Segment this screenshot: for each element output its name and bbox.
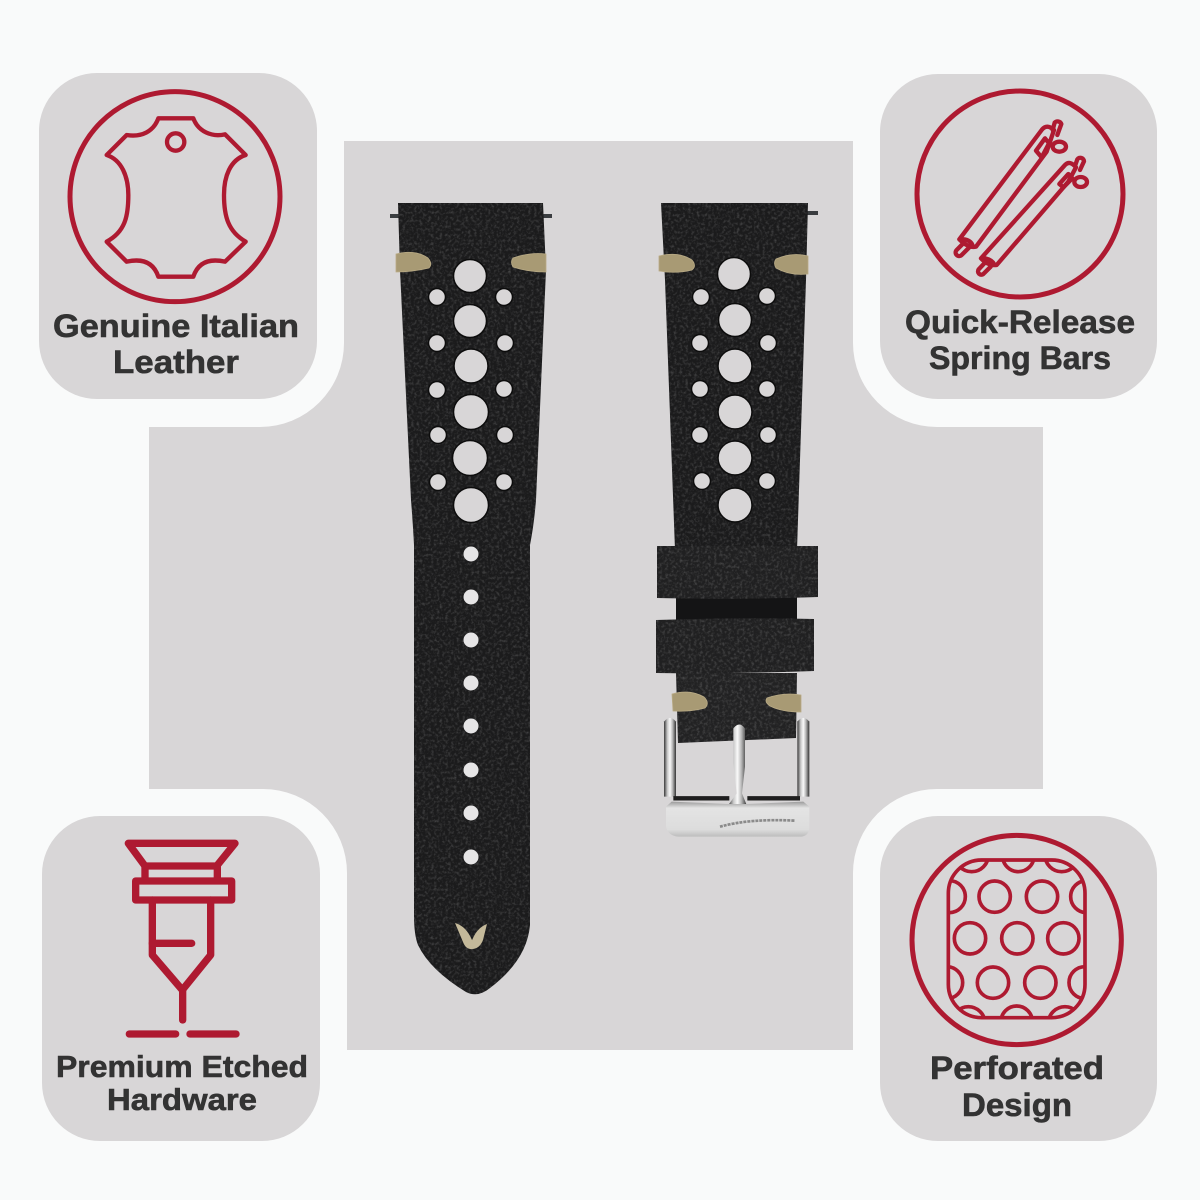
strap gap segments — [676, 590, 797, 630]
lower stitches — [672, 692, 801, 712]
long watch strap piece — [390, 203, 552, 994]
small perforations — [428, 288, 514, 490]
buckle side watch strap piece — [656, 203, 818, 837]
label: perforated design: Perforated — [930, 1050, 1104, 1086]
label: quick-release spring bars: Spring Bars — [929, 340, 1111, 376]
background panel: central grey cross — [149, 141, 1043, 1050]
spring bar tip — [806, 211, 818, 215]
keeper loop 1 — [657, 546, 818, 599]
label: genuine italian leather: Leather — [113, 344, 239, 380]
buckle tongue — [728, 724, 747, 805]
buckle right bar — [797, 718, 809, 797]
large perforations — [452, 260, 488, 522]
label: perforated design: Design — [962, 1087, 1072, 1123]
label: quick-release spring bars: Quick-Release — [905, 304, 1135, 340]
panel: perforated design — [853, 789, 1157, 1141]
buckle left bar — [664, 718, 676, 797]
adjustment holes — [464, 546, 478, 864]
keeper loop 2 — [656, 618, 814, 673]
icon: leather hide — [70, 92, 280, 302]
label: genuine italian leather: Genuine Italian — [53, 308, 299, 344]
label: premium etched hardware: Hardware — [107, 1082, 257, 1117]
icon: spring bars — [917, 91, 1123, 297]
buckle — [664, 718, 809, 837]
small perforations — [692, 288, 776, 490]
large perforations — [718, 258, 752, 522]
spring bar tips — [390, 214, 552, 218]
panel: premium etched hardware — [15, 789, 347, 1168]
logo engraving — [720, 820, 795, 827]
panel: quick-release spring bars — [853, 47, 1184, 427]
strap upper body — [661, 203, 808, 550]
upper stitches — [659, 254, 808, 274]
stitches — [396, 252, 546, 272]
v stitch — [455, 923, 487, 949]
icon: etching laser — [128, 843, 236, 1034]
icon: perforated pattern — [912, 835, 1121, 1045]
buckle inner edge — [673, 792, 800, 805]
strap body — [398, 203, 546, 994]
panel: genuine italian leather — [12, 46, 344, 427]
strap lower body — [676, 673, 797, 743]
buckle plate — [666, 802, 809, 837]
label: premium etched hardware: Premium Etched — [56, 1049, 308, 1084]
